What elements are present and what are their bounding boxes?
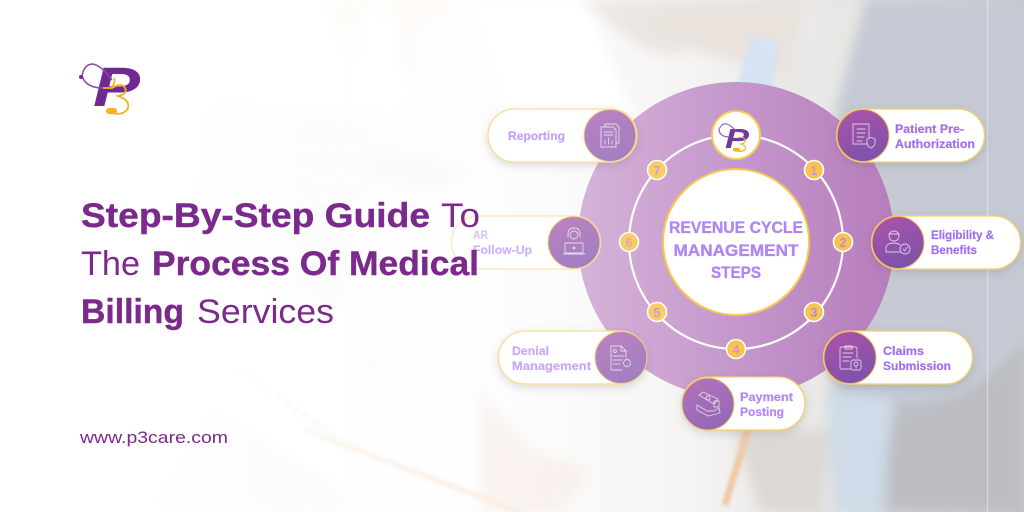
title: Billing bbox=[81, 293, 184, 331]
central wheel bbox=[578, 82, 894, 398]
title: To bbox=[441, 197, 480, 235]
icon: support agent at laptop bbox=[563, 228, 585, 254]
step 6 pill: AR follow-up bbox=[452, 216, 600, 269]
step 3 pill: claims submission: Submission bbox=[883, 361, 951, 373]
step 3 pill: claims submission bbox=[824, 331, 972, 384]
logo: P3 stethoscope brand mark bbox=[79, 55, 141, 118]
step 4 pill: payment posting: Payment bbox=[740, 392, 793, 404]
small logo badge: P bbox=[725, 123, 749, 154]
step 4 pill: payment posting bbox=[682, 377, 805, 430]
marker 1 bbox=[804, 160, 824, 180]
title: Step-By-Step Guide bbox=[81, 197, 430, 235]
marker 4: 4 bbox=[733, 343, 740, 357]
marker 7: 7 bbox=[654, 164, 661, 178]
marker 5: 5 bbox=[654, 306, 661, 320]
step 1 pill: patient pre-authorization: Patient Pre- bbox=[895, 124, 964, 136]
website url: www.p3care.com bbox=[79, 428, 228, 447]
step 1 pill: patient pre-authorization bbox=[836, 109, 984, 162]
center circle: revenue cycle management steps bbox=[663, 169, 809, 315]
step 5 pill: denial management: Management bbox=[512, 361, 591, 373]
logo: P3 stethoscope brand mark: P bbox=[93, 55, 141, 118]
title: The bbox=[81, 245, 140, 283]
center circle: revenue cycle management steps: MANAGEMENT bbox=[674, 241, 799, 260]
small logo badge bbox=[712, 111, 760, 159]
icon: denied document bbox=[611, 346, 630, 370]
step 2 pill: eligibility and benefits: Benefits bbox=[931, 245, 977, 257]
title: Services bbox=[197, 293, 334, 331]
marker 6: 6 bbox=[626, 236, 633, 250]
step 3 pill: claims submission: Claims bbox=[883, 346, 924, 358]
step 6 pill: AR follow-up: AR bbox=[473, 230, 489, 242]
title: Process Of Medical bbox=[152, 245, 479, 283]
step 7 pill: reporting: Reporting bbox=[508, 131, 565, 143]
step 2 pill: eligibility and benefits bbox=[872, 216, 1020, 269]
icon: stacked report pages bbox=[601, 124, 619, 147]
center circle: revenue cycle management steps: STEPS bbox=[711, 263, 761, 282]
marker 3: 3 bbox=[811, 306, 818, 320]
title bbox=[81, 197, 480, 331]
step number markers bbox=[620, 160, 852, 358]
icon: clipboard with upload badge bbox=[840, 346, 861, 370]
marker 2: 2 bbox=[840, 236, 847, 250]
marker 3 bbox=[804, 302, 824, 322]
step 1 pill: patient pre-authorization: Authorization bbox=[895, 139, 975, 151]
center circle: revenue cycle management steps: REVENUE CYCLE bbox=[669, 218, 803, 237]
step 2 pill: eligibility and benefits: Eligibility & bbox=[931, 230, 994, 242]
icon: hand holding cash bbox=[697, 392, 720, 416]
step 7 pill: reporting bbox=[488, 109, 637, 162]
step 5 pill: denial management: Denial bbox=[512, 346, 549, 358]
icon: document with shield bbox=[853, 124, 875, 148]
step 6 pill: AR follow-up: Follow-Up bbox=[473, 245, 532, 257]
marker 5 bbox=[648, 302, 666, 322]
step 5 pill: denial management bbox=[498, 331, 647, 384]
step 4 pill: payment posting: Posting bbox=[740, 407, 784, 419]
marker 6 bbox=[620, 232, 638, 252]
marker 1: 1 bbox=[811, 164, 818, 178]
marker 2 bbox=[834, 232, 852, 252]
marker 4 bbox=[726, 340, 746, 358]
icon: person with check badge bbox=[886, 231, 910, 254]
marker 7 bbox=[648, 160, 666, 180]
